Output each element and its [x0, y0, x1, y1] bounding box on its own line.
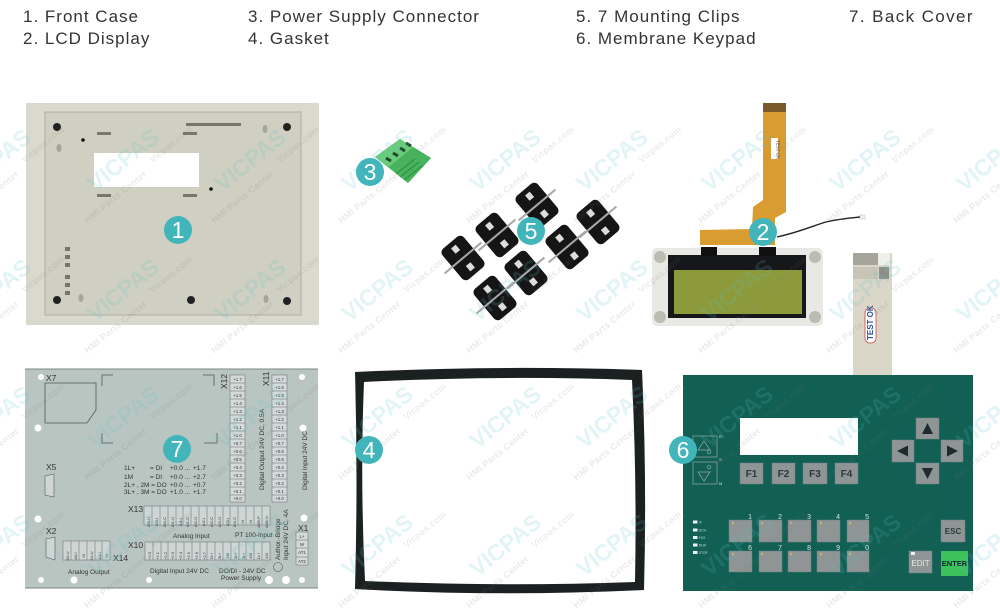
terminal column X11: +1.0 — [275, 433, 284, 438]
terminal row X13: AI3-I — [225, 518, 230, 526]
watermark grid: VICPAS — [82, 253, 164, 327]
terminal column X12: +1.3 — [233, 409, 242, 414]
watermark grid: Vicpas.com — [762, 124, 808, 165]
badge 5 — [517, 217, 545, 245]
terminal row X10: 2L+ — [209, 552, 214, 559]
terminal row X13: AI2-I — [201, 518, 206, 526]
terminal row X14 — [63, 541, 110, 561]
watermark grid: HMI Parts Center — [336, 426, 403, 482]
number keys: 6 — [748, 545, 752, 552]
board labels: +1.7 — [193, 465, 206, 472]
watermark grid: HMI Parts Center — [336, 169, 403, 225]
terminal row X10: +2.5 — [186, 551, 191, 560]
board labels: Analog Input — [173, 533, 210, 540]
board labels: X5 — [46, 462, 57, 472]
number keys: 2 — [778, 514, 782, 521]
terminal column X11: +0.4 — [275, 465, 284, 470]
badge 5: 5 — [525, 218, 537, 244]
terminal block X1: AT1 — [298, 550, 306, 555]
watermark grid: VICPAS — [209, 123, 291, 197]
terminal block X1 — [296, 532, 308, 565]
status indicators: RUN — [699, 544, 707, 548]
terminal row X10: 2M — [225, 553, 230, 559]
watermark grid: Vicpas.com — [20, 254, 66, 295]
watermark grid: Vicpas.com — [530, 509, 576, 550]
terminal row X10: +2.4 — [178, 551, 183, 560]
terminal column X12: +0.7 — [233, 441, 242, 446]
watermark grid: HMI Parts Center — [696, 169, 763, 225]
badge 4 — [355, 436, 383, 464]
watermark grid: Vicpas.com — [402, 381, 448, 422]
terminal row X10: 1M — [264, 553, 269, 559]
badge 2: 2 — [757, 219, 769, 245]
heading: parts list: 5. 7 Mounting Clips — [576, 7, 741, 26]
terminal column X11: +1.4 — [275, 401, 284, 406]
watermark grid: VICPAS — [696, 253, 778, 327]
watermark grid: Vicpas.com — [637, 124, 683, 165]
number keys: 5 — [865, 514, 869, 521]
board labels: X14 — [113, 553, 128, 563]
watermark grid: VICPAS — [336, 253, 418, 327]
watermark grid: HMI Parts Center — [464, 299, 531, 355]
terminal column X11: +0.2 — [275, 481, 284, 486]
terminal column X11: +1.7 — [275, 377, 284, 382]
board labels: +0.0 ... — [170, 482, 190, 489]
badge 1 — [164, 216, 192, 244]
terminal row X13: AI0-I — [154, 518, 159, 526]
badge 6: 6 — [677, 437, 689, 463]
watermark grid: VICPAS — [824, 380, 906, 454]
watermark grid: Vicpas.com — [148, 124, 194, 165]
board labels: Input 24V DC, 4A — [283, 509, 290, 560]
watermark grid: VICPAS — [571, 380, 653, 454]
function keys: F4 — [841, 469, 853, 480]
board labels: 2L+ , 2M = DO — [124, 482, 167, 489]
board labels: +0.0 ... — [170, 474, 190, 481]
mode selector boxes — [693, 434, 722, 486]
terminal column X11: +0.5 — [275, 457, 284, 462]
watermark grid: Vicpas.com — [762, 509, 808, 550]
watermark grid: Vicpas.com — [530, 254, 576, 295]
terminal column X12: +1.4 — [233, 401, 242, 406]
number keys — [729, 514, 869, 572]
terminal column X11: +0.6 — [275, 449, 284, 454]
panel: gasket — [355, 368, 645, 593]
terminal column X12: +0.0 — [233, 496, 242, 501]
watermark grid: VICPAS — [824, 508, 906, 582]
watermark grid: VICPAS — [209, 380, 291, 454]
watermark grid: Vicpas.com — [530, 381, 576, 422]
board labels: Power Supply — [221, 575, 262, 582]
board labels: = DI — [150, 465, 162, 472]
watermark grid: HMI Parts Center — [696, 554, 763, 610]
terminal row X13 — [144, 506, 270, 528]
board labels: X11 — [261, 371, 271, 386]
watermark grid: VICPAS — [571, 123, 653, 197]
watermark grid: Vicpas.com — [148, 254, 194, 295]
terminal row X13: AI2-U — [193, 517, 198, 527]
board labels: X13 — [128, 504, 143, 514]
board labels: Digital Input 24V DC — [150, 568, 209, 575]
terminal row X10: +2.6 — [194, 551, 199, 560]
heading: parts list: 1. Front Case — [23, 7, 139, 26]
number keys: 4 — [836, 514, 840, 521]
watermark grid: HMI Parts Center — [571, 554, 638, 610]
watermark grid: VICPAS — [696, 123, 778, 197]
number keys: 8 — [807, 545, 811, 552]
number keys: 7 — [778, 545, 782, 552]
terminal row X14: A1-I — [97, 552, 102, 560]
command keys: ENTER — [942, 559, 968, 568]
watermark grid: VICPAS — [82, 508, 164, 582]
watermark grid: Vicpas.com — [637, 509, 683, 550]
board labels: Digital Output 24V DC, 0.5A — [259, 408, 266, 490]
terminal row X10: +2.7 — [202, 551, 207, 560]
arrow keys — [892, 418, 963, 484]
watermark grid: Vicpas.com — [762, 254, 808, 295]
watermark grid: Vicpas.com — [530, 124, 576, 165]
watermark grid: HMI Parts Center — [82, 426, 149, 482]
watermark grid: VICPAS — [82, 123, 164, 197]
board labels: X7 — [46, 373, 57, 383]
badge 3: 3 — [364, 159, 376, 185]
panel: LCD display: TEST OK — [776, 140, 780, 159]
function keys: F1 — [746, 469, 758, 480]
terminal column X11: +0.0 — [275, 496, 284, 501]
panel: membrane keypad: TEST OK — [866, 305, 875, 340]
status indicators — [693, 520, 708, 555]
watermark grid: VICPAS — [571, 508, 653, 582]
number keys: 0 — [865, 545, 869, 552]
watermark grid: HMI Parts Center — [696, 426, 763, 482]
badge 4: 4 — [363, 437, 376, 463]
heading: parts list: 3. Power Supply Connector — [248, 7, 480, 26]
terminal column X12: +1.1 — [233, 425, 242, 430]
watermark grid: VICPAS — [82, 380, 164, 454]
status indicators: FKS — [699, 536, 705, 540]
terminal block X1: M — [300, 542, 304, 547]
panel: back cover — [25, 369, 318, 588]
panel: LCD display — [652, 103, 865, 326]
terminal column X11 — [272, 375, 287, 502]
board labels: X12 — [219, 374, 229, 389]
terminal column X12: +1.6 — [233, 385, 242, 390]
panel: front case — [26, 103, 319, 325]
watermark grid: Vicpas.com — [762, 381, 808, 422]
watermark grid: Vicpas.com — [20, 509, 66, 550]
terminal block X1: AT2 — [298, 559, 306, 564]
board labels: 1L+ — [124, 465, 135, 472]
watermark grid: HMI Parts Center — [824, 554, 891, 610]
terminal column X12: +1.2 — [233, 417, 242, 422]
heading: parts list: 7. Back Cover — [849, 7, 974, 26]
terminal column X12: +0.6 — [233, 449, 242, 454]
watermark grid: HMI Parts Center — [209, 299, 276, 355]
command keys: EDIT — [911, 559, 930, 568]
watermark grid: HMI Parts Center — [824, 299, 891, 355]
status indicators: STOP — [699, 551, 708, 555]
watermark grid: Vicpas.com — [20, 381, 66, 422]
watermark grid: HMI Parts Center — [209, 169, 276, 225]
terminal row X14: M — [104, 554, 109, 558]
board labels: X1 — [298, 523, 309, 533]
terminal row X10: 3L+ — [241, 552, 246, 559]
watermark grid: HMI Parts Center — [464, 169, 531, 225]
watermark grid: Vicpas.com — [637, 254, 683, 295]
mode selector boxes: M — [719, 481, 722, 486]
watermark grid: VICPAS — [209, 508, 291, 582]
terminal row X13: M — [240, 520, 245, 524]
terminal column X11: +1.6 — [275, 385, 284, 390]
icon: power supply connector — [375, 139, 431, 183]
watermark grid: Vicpas.com — [402, 124, 448, 165]
badge 7: 7 — [171, 436, 183, 462]
watermark grid: Vicpas.com — [402, 509, 448, 550]
watermark grid: Vicpas.com — [275, 509, 321, 550]
board labels: X2 — [46, 526, 57, 536]
terminal row X10: +2.0 — [147, 551, 152, 560]
watermark grid: Vicpas.com — [890, 381, 936, 422]
watermark grid: Vicpas.com — [637, 381, 683, 422]
watermark grid: VICPAS — [824, 123, 906, 197]
board labels: 3L+ , 3M = DO — [124, 489, 167, 496]
terminal row X10: 3L+ — [233, 552, 238, 559]
watermark grid: Vicpas.com — [275, 254, 321, 295]
connectors X5 and X2 — [45, 474, 282, 572]
watermark grid: HMI Parts Center — [82, 169, 149, 225]
watermark grid: Vicpas.com — [148, 381, 194, 422]
terminal column X12 — [230, 375, 245, 502]
terminal row X13: AI2-C — [209, 517, 214, 527]
holes — [34, 374, 308, 584]
terminal column X11: +0.7 — [275, 441, 284, 446]
watermark grid: VICPAS — [696, 380, 778, 454]
watermark grid: VICPAS — [336, 508, 418, 582]
heading: parts list: 2. LCD Display — [23, 29, 150, 48]
heading: parts list: 4. Gasket — [248, 29, 330, 48]
watermark grid: Vicpas.com — [890, 124, 936, 165]
board labels: Author.-Bridge — [275, 518, 282, 560]
terminal column X11: +0.3 — [275, 473, 284, 478]
terminal row X13: A0B-N — [264, 516, 269, 528]
watermark grid: HMI Parts Center — [336, 554, 403, 610]
badge 7 — [163, 435, 191, 463]
board labels: +0.7 — [193, 482, 206, 489]
watermark grid: Vicpas.com — [890, 254, 936, 295]
terminal column X12: +0.5 — [233, 457, 242, 462]
terminal row X14: A1-U — [89, 551, 94, 561]
watermark grid: VICPAS — [336, 123, 418, 197]
board labels: +0.0 ... — [170, 465, 190, 472]
status indicators: DCH — [699, 528, 707, 532]
watermark grid: VICPAS — [336, 380, 418, 454]
watermark grid: HMI Parts Center — [336, 299, 403, 355]
board labels: = DI — [150, 474, 162, 481]
terminal row X10: 3M — [248, 553, 253, 559]
watermark grid: Vicpas.com — [275, 381, 321, 422]
watermark grid: Vicpas.com — [20, 124, 66, 165]
terminal column X12: +1.0 — [233, 433, 242, 438]
terminal row X13: AI1-U — [170, 517, 175, 527]
terminal column X12: +1.5 — [233, 393, 242, 398]
terminal row X13: A0B-P — [256, 516, 261, 528]
watermark grid: HMI Parts Center — [464, 554, 531, 610]
board labels — [46, 371, 309, 582]
watermark grid: Vicpas.com — [890, 509, 936, 550]
terminal row X13: AI0-U — [146, 517, 151, 527]
watermark grid: Vicpas.com — [148, 509, 194, 550]
heading: parts list: 6. Membrane Keypad — [576, 29, 757, 48]
terminal column X11: +1.3 — [275, 409, 284, 414]
watermark grid: HMI Parts Center — [82, 299, 149, 355]
terminal column X12: +0.4 — [233, 465, 242, 470]
badge 1: 1 — [172, 217, 184, 243]
terminal row X10 — [145, 542, 270, 560]
board labels: +2.7 — [193, 474, 206, 481]
watermark grid: HMI Parts Center — [824, 426, 891, 482]
watermark grid: HMI Parts Center — [82, 554, 149, 610]
terminal row X10: 1L+ — [256, 552, 261, 559]
function keys: F2 — [778, 469, 790, 480]
panel: membrane keypad — [683, 253, 973, 591]
watermark grid: HMI Parts Center — [209, 554, 276, 610]
watermark grid: VICPAS — [464, 508, 546, 582]
terminal row X13: AI3-C — [232, 517, 237, 527]
watermark grid: HMI Parts Center — [571, 299, 638, 355]
terminal row X10: +2.2 — [163, 551, 168, 560]
terminal column X11: +1.2 — [275, 417, 284, 422]
watermark grid: HMI Parts Center — [571, 169, 638, 225]
mode selector boxes: S — [719, 457, 722, 462]
board labels: 1M — [124, 474, 133, 481]
terminal row X13: AI0-C — [162, 517, 167, 527]
badge 2 — [749, 218, 777, 246]
board labels: DO/DI - 24V DC — [219, 568, 266, 575]
terminal column X12: +1.7 — [233, 377, 242, 382]
terminal row X14: A0-I — [73, 552, 78, 560]
number keys: 1 — [748, 514, 752, 521]
watermark grid: VICPAS — [696, 508, 778, 582]
terminal column X12: +0.1 — [233, 489, 242, 494]
board labels: Digital Input 24V DC — [302, 431, 309, 490]
watermark grid: HMI Parts Center — [696, 299, 763, 355]
terminal row X14: M — [81, 554, 86, 558]
watermark grid: VICPAS — [824, 253, 906, 327]
terminal row X14: A0-U — [65, 551, 70, 561]
board labels: PT 100-Input — [235, 532, 273, 539]
board labels: Analog Output — [68, 569, 110, 576]
number keys: 9 — [836, 545, 840, 552]
board labels: X10 — [128, 540, 143, 550]
badge 6 — [669, 436, 697, 464]
terminal column X11: +1.1 — [275, 425, 284, 430]
terminal row X10: 3L+ — [217, 552, 222, 559]
board labels: +1.0 ... — [170, 489, 190, 496]
command keys — [909, 520, 968, 576]
terminal row X13: M — [248, 520, 253, 524]
terminal row X13: AI1-C — [185, 517, 190, 527]
watermark grid: HMI Parts Center — [464, 426, 531, 482]
watermark grid: Vicpas.com — [402, 254, 448, 295]
board labels: +1.7 — [193, 489, 206, 496]
terminal row X10: +2.3 — [170, 551, 175, 560]
X7 outline and brackets — [45, 375, 217, 443]
badge 3 — [356, 158, 384, 186]
status indicators: IF — [699, 520, 702, 524]
icon: mounting clips — [432, 174, 629, 329]
terminal column X11: +0.1 — [275, 489, 284, 494]
watermark grid: HMI Parts Center — [824, 169, 891, 225]
terminal row X13: AI3-U — [217, 517, 222, 527]
watermark grid: Vicpas.com — [275, 124, 321, 165]
function keys: F3 — [809, 469, 821, 480]
watermark grid: VICPAS — [464, 123, 546, 197]
function keys — [740, 463, 858, 484]
terminal row X13: AI1-I — [178, 518, 183, 526]
watermark grid: VICPAS — [464, 380, 546, 454]
number keys: 3 — [807, 514, 811, 521]
watermark grid: HMI Parts Center — [571, 426, 638, 482]
command keys: ESC — [945, 527, 961, 536]
watermark grid: VICPAS — [571, 253, 653, 327]
watermark grid: VICPAS — [209, 253, 291, 327]
terminal block X1: L+ — [299, 534, 305, 539]
terminal row X10: +2.1 — [155, 551, 160, 560]
watermark grid: VICPAS — [464, 253, 546, 327]
mode selector boxes: R — [719, 434, 722, 439]
terminal column X12: +0.2 — [233, 481, 242, 486]
heading: parts list — [23, 7, 974, 48]
terminal column X11: +1.5 — [275, 393, 284, 398]
watermark grid: HMI Parts Center — [209, 426, 276, 482]
terminal column X12: +0.3 — [233, 473, 242, 478]
